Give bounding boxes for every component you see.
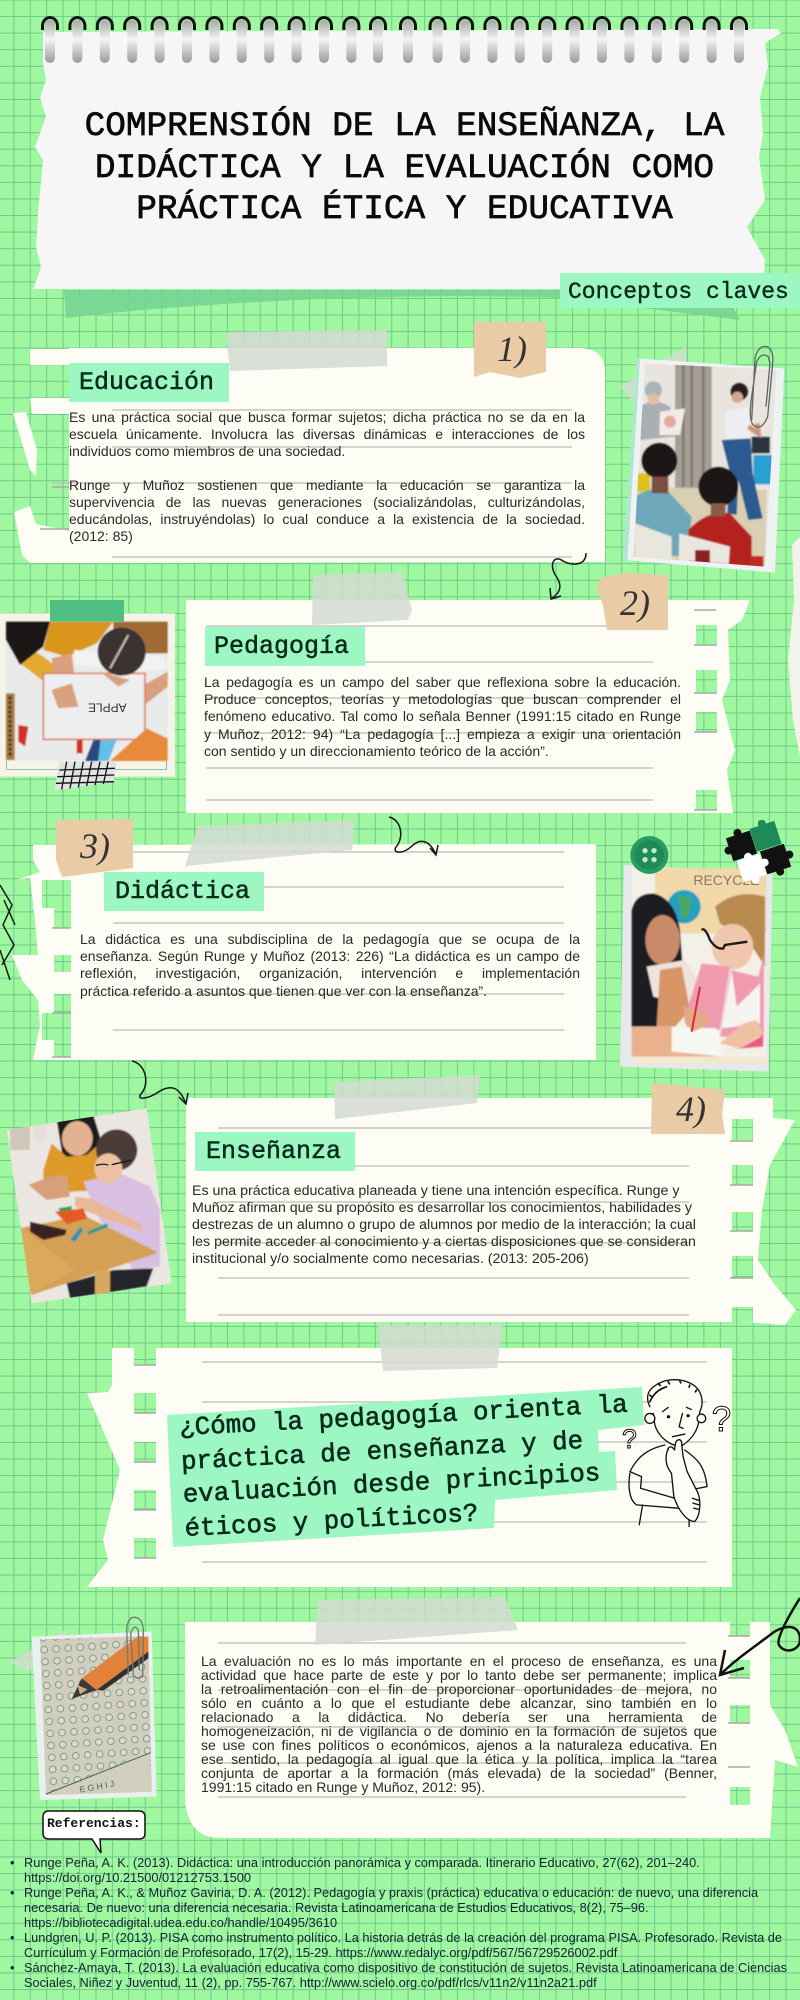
text: enseñanza: les permite acceder al conocimiento y a ciertas disposiciones que se consideran xyxy=(192,1234,696,1250)
text: educación xyxy=(69,409,586,544)
number tag 1 xyxy=(474,322,546,378)
text: evaluación: actividad que hace parte de este y por lo tanto debe ser permanente; implica xyxy=(201,1667,717,1683)
text: educación: Runge y Muñoz sostienen que mediante la educación se garantiza la xyxy=(69,477,585,493)
panel: Didáctica xyxy=(12,819,596,1060)
heading: Enseñanza xyxy=(195,1132,355,1171)
icon: thinking person xyxy=(622,1379,731,1528)
number tag 2: 2) xyxy=(620,583,650,623)
tape xyxy=(185,820,355,866)
tape xyxy=(312,572,412,625)
references list: Lundgren, U. P. (2013). PISA como instrumento político. La historia detrás de la creación del programa PISA. Profesorado. Revista de xyxy=(24,1930,782,1945)
text: didáctica: práctica referido a asuntos que tienen que ver con la enseñanza”. xyxy=(80,983,487,999)
subtitle tag: conceptos claves: Conceptos claves xyxy=(568,279,789,305)
text: educación: supervivencia de las nuevas generaciones (socializándolas, culturizándolas, xyxy=(69,494,585,510)
photo: multiple choice test and pencil xyxy=(10,1616,157,1800)
heading: Pedagogía xyxy=(205,627,365,666)
photo: teacher with students xyxy=(620,346,784,573)
text: pedagogía: fenómeno educativo. Tal como lo señala Benner (1991:15 citado en Runge xyxy=(204,708,681,724)
text: evaluación: relacionado a la didáctica. No debería ser una herramienta de xyxy=(201,1709,717,1725)
panel: Pedagogía xyxy=(186,572,750,813)
references list: Runge Peña, A. K., & Muñoz Gaviria, D. A. (2012). Pedagogía y praxis (práctica) educativa o educación: de nuevo, una diferencia xyxy=(24,1885,758,1900)
icon: button xyxy=(630,836,668,874)
heading: Pedagogía: Pedagogía xyxy=(214,632,349,661)
text: pedagogía: con sentido y un direccionamiento teórico de la acción”. xyxy=(204,743,549,759)
photo: girl playing with clay and teacher xyxy=(6,1108,172,1304)
question text: éticos y políticos? xyxy=(184,1499,479,1543)
text: didáctica: reflexión, investigación, organización, intervención e implementación xyxy=(80,965,580,981)
text: enseñanza xyxy=(192,1183,696,1267)
text: enseñanza: institucional y/o socialmente como necesarias. (2013: 205-206) xyxy=(192,1251,589,1267)
text: enseñanza: Es una práctica educativa planeada y tiene una intención específica. Runge y xyxy=(192,1183,679,1199)
heading: Didáctica xyxy=(104,872,264,911)
text: educación: Es una práctica social que busca formar sujetos; dicha práctica no se da en la xyxy=(69,409,585,425)
photo: girl and teacher with recycling poster: RECYCLE xyxy=(693,872,759,888)
panel: Educación xyxy=(13,322,605,563)
subtitle tag: conceptos claves xyxy=(560,273,800,308)
references list: Sánchez-Amaya, T. (2013). La evaluación educativa como dispositivo de constitución de sujetos. Revista Latinoamericana de Ciencias xyxy=(24,1960,787,1975)
references list: • xyxy=(10,1930,14,1945)
arrow: educación to pedagogía xyxy=(549,553,587,600)
title xyxy=(85,106,725,229)
text: evaluación: se use con fines políticos o económicos, ajenos a la naturaleza educativa. En xyxy=(201,1737,717,1753)
paperclip xyxy=(750,346,773,427)
question text: evaluación desde principios xyxy=(182,1459,601,1510)
references list: necesaria. De nuevo: una diferencia necesaria. Revista Latinoamericana de Estudios Educativos, 8(2), 75–96. xyxy=(24,1900,649,1915)
icon: puzzle pieces xyxy=(719,813,799,890)
text: didáctica: La didáctica es una subdisciplina de la pedagogía que se ocupa de la xyxy=(80,931,580,947)
arrow: pedagogía to didáctica xyxy=(388,816,439,856)
text: enseñanza: destrezas de un alumno o grupo de alumnos por medio de la interacción; la cual xyxy=(192,1217,696,1233)
photo: multiple choice test and pencil: E G H I J xyxy=(79,1779,115,1795)
"apple" written upside down on the whiteboard: APPLE xyxy=(88,700,127,714)
photo: child writing on whiteboard xyxy=(0,600,175,791)
references list: Currículum y Formación de Profesorado, 17(2), 15-29. https://www.redalyc.org/pdf/567/56729526002.pdf xyxy=(24,1945,617,1960)
references list: • xyxy=(10,1960,14,1975)
text: evaluación: La evaluación no es lo más importante en el proceso de enseñanza, es una xyxy=(201,1653,717,1669)
question text xyxy=(179,1391,628,1543)
text: pedagogía xyxy=(204,674,681,759)
callout: referencias xyxy=(42,1810,146,1854)
title: COMPRENSIÓN DE LA ENSEÑANZA, LA xyxy=(85,107,724,146)
text: pedagogía: La pedagogía es un campo del saber que reflexiona sobre la educación. xyxy=(204,674,681,690)
text: educación: escuela únicamente. Involucra las diversas dinámicas e interacciones de los xyxy=(69,426,585,442)
references list xyxy=(10,1855,787,1990)
text: evaluación: ese sentido, la pedagogía al igual que la ética y la política, implica la “tarea xyxy=(201,1751,717,1767)
text: pedagogía: y Muñoz, 2012: 94) “La pedagogía [...] empieza a exigir una orientación xyxy=(204,726,681,742)
green tape xyxy=(50,600,124,622)
icon: thinking person: ? xyxy=(712,1400,731,1439)
panel: question card xyxy=(87,1325,732,1587)
text: educación: educándolas, instruyéndolas) lo cual conduce a la existencia de la sociedad. xyxy=(69,511,585,527)
callout: referencias: Referencias: xyxy=(47,1816,141,1831)
number tag 2 xyxy=(597,573,668,630)
tape xyxy=(378,1325,503,1371)
text: didáctica xyxy=(80,931,580,999)
references list: Runge Peña, A. K. (2013). Didáctica: una introducción panorámica y comparada. Itinerario Educativo, 27(62), 201–240. xyxy=(24,1855,700,1870)
paperclip xyxy=(127,1617,143,1678)
highlight behind question xyxy=(167,1387,644,1547)
heading: Didáctica: Didáctica xyxy=(115,877,250,906)
tape xyxy=(334,1075,480,1119)
number tag 3: 3) xyxy=(79,826,110,866)
heading: Educación xyxy=(69,363,229,402)
heading: Enseñanza: Enseñanza xyxy=(206,1137,341,1166)
panel: evaluación xyxy=(185,1597,798,1838)
number tag 3 xyxy=(56,819,133,877)
text: evaluación: conjunta de aportar a la formación (más elevada) de la sociedad” (Benner, xyxy=(201,1765,717,1781)
checker tape xyxy=(54,762,116,791)
number tag 4 xyxy=(651,1083,725,1134)
text: evaluación: la retroalimentación con el fin de proporcionar oportunidades de mejora, no xyxy=(201,1681,717,1697)
references list: • xyxy=(10,1855,14,1870)
number tag 1: 1) xyxy=(497,329,527,369)
arrow: didáctica to enseñanza xyxy=(132,1060,189,1106)
arrow: large looping arrow to evaluación xyxy=(718,1597,800,1677)
text: evaluación: 1991:15 citado en Runge y Muñoz, 2012: 95). xyxy=(201,1779,485,1795)
references list: • xyxy=(10,1885,14,1900)
icon: thinking person: ? xyxy=(622,1424,637,1454)
header panel: spiral notebook sheet with title xyxy=(33,16,800,320)
text: enseñanza: Muñoz afirman que su propósito es desarrollar los conocimientos, habilidades y xyxy=(192,1200,692,1216)
text: evaluación xyxy=(201,1653,718,1795)
panel: Enseñanza xyxy=(186,1075,796,1325)
tape xyxy=(226,330,387,371)
text: evaluación: sólo en cuánto a lo que el estudiante debe alcanzar, sino también en lo xyxy=(201,1695,717,1711)
text: didáctica: enseñanza. Según Runge y Muñoz (2013: 226) “La didáctica es un campo de xyxy=(80,948,580,964)
title: DIDÁCTICA Y LA EVALUACIÓN COMO xyxy=(95,149,714,188)
question text: práctica de enseñanza y de xyxy=(180,1426,584,1477)
references list: Sociales, Niñez y Juventud, 11 (2), pp. 755-767. http://www.scielo.org.co/pdf/rlcs/v11n2/v11n2a21.pdf xyxy=(24,1975,597,1990)
photo: girl and teacher with recycling poster xyxy=(620,820,794,1072)
text: pedagogía: Produce conceptos, teorías y metodologías que buscan comprender el xyxy=(204,691,681,707)
text: educación: (2012: 85) xyxy=(69,528,133,544)
question text: ¿Cómo la pedagogía orienta la xyxy=(179,1391,628,1443)
heading: Educación: Educación xyxy=(79,368,214,397)
title: PRÁCTICA ÉTICA Y EDUCATIVA xyxy=(136,190,673,229)
text: educación: individuos como miembros de una sociedad. xyxy=(69,443,345,459)
number tag 4: 4) xyxy=(676,1089,706,1129)
references list: https://bibliotecadigital.udea.edu.co/handle/10495/3610 xyxy=(24,1915,337,1930)
references list: https://doi.org/10.21500/01212753.1500 xyxy=(24,1870,251,1885)
text: evaluación: homogeneización, ni de vigilancia o de dominio en la formación de sujetos que xyxy=(201,1723,717,1739)
tape xyxy=(315,1597,518,1645)
